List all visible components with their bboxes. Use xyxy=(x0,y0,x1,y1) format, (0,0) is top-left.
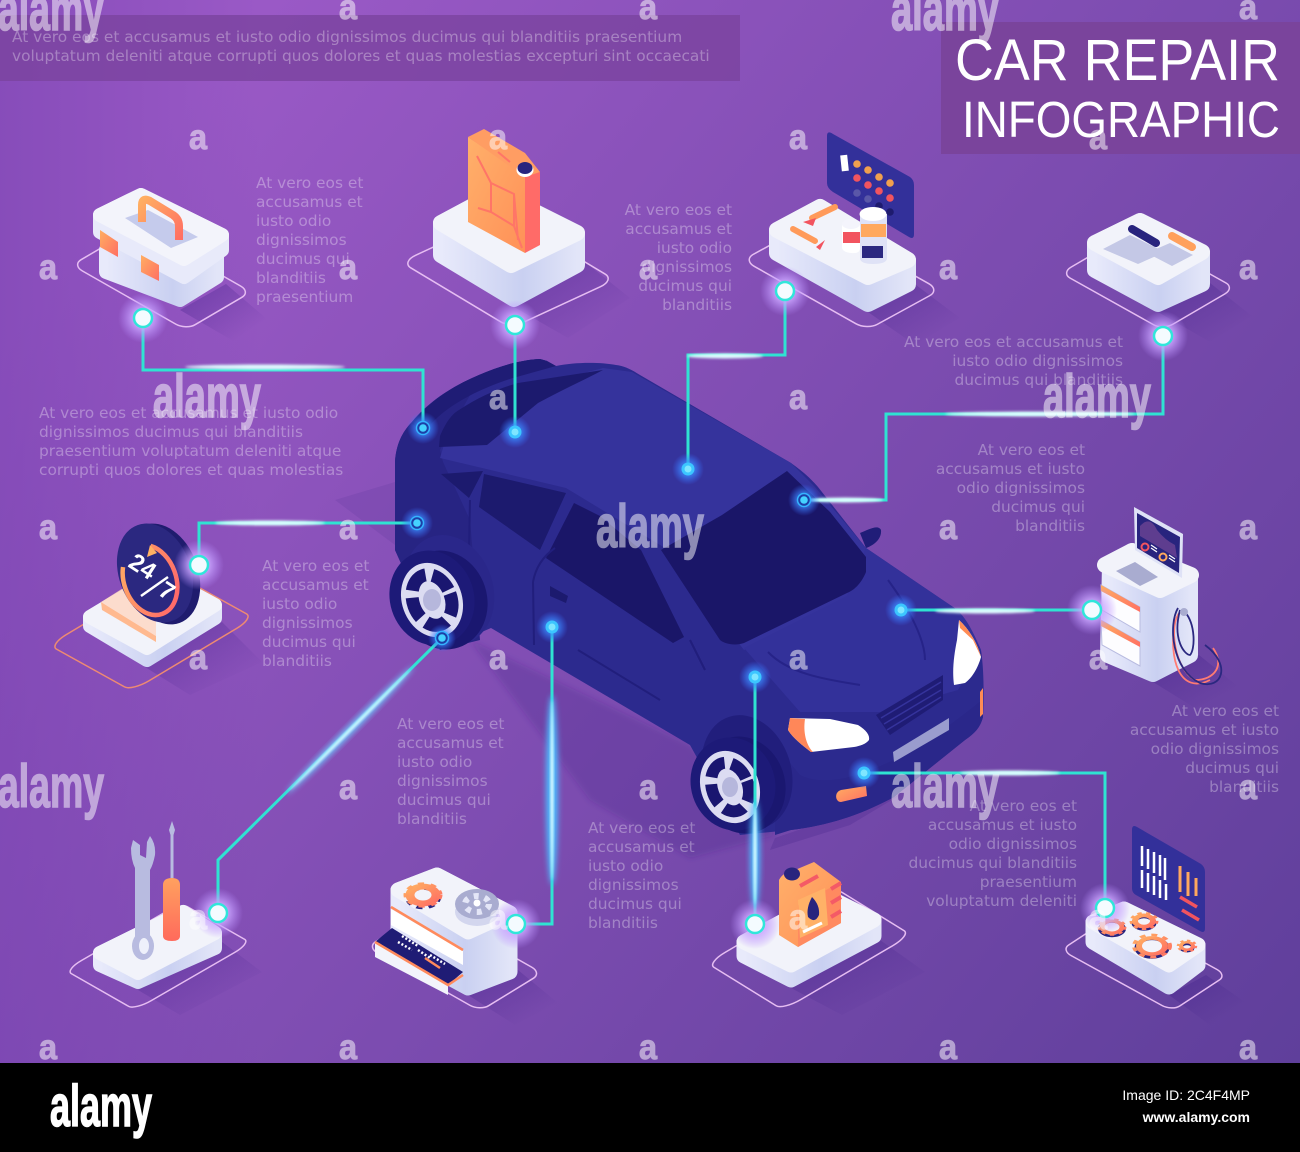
jerry can emboss xyxy=(477,152,522,248)
text block: panels: At vero eos et accusamus et xyxy=(904,333,1123,351)
rear window xyxy=(439,370,603,447)
text block: right upper: ducimus qui xyxy=(991,498,1085,516)
text block: wrench xyxy=(397,715,504,828)
gears xyxy=(1099,919,1125,936)
peach glow on slab xyxy=(101,602,156,642)
text block: toolbox: accusamus et xyxy=(256,193,363,211)
text block: drawer xyxy=(588,819,695,932)
car point: bumper xyxy=(848,757,880,789)
clock disc: 24 xyxy=(124,548,161,586)
text block: 24/7: dignissimos xyxy=(262,614,353,632)
node: wrench xyxy=(193,888,243,938)
text block: toolbox: dignissimos xyxy=(256,231,347,249)
text block: jerry can: iusto odio xyxy=(657,239,732,257)
oil cap xyxy=(784,868,800,880)
text block: diagnostic: accusamus et iusto xyxy=(1130,721,1279,739)
watermark tiles: a xyxy=(939,1028,957,1067)
node: paint xyxy=(760,266,810,316)
intro text panel: voluptatum deleniti atque corrupti quos dolores et quas molestias excepturi sint occaecati xyxy=(12,47,710,65)
paint panel xyxy=(827,132,914,238)
node: oil xyxy=(730,899,780,949)
watermark tiles: a xyxy=(789,118,807,157)
text block: panels: ducimus qui blanditiis xyxy=(954,371,1123,389)
licence plate xyxy=(893,718,949,762)
diagnostic screen xyxy=(1134,507,1183,578)
node: gears xyxy=(1080,883,1130,933)
gear xyxy=(406,884,440,907)
watermark tiles: a xyxy=(639,248,657,287)
watermark tiles: a xyxy=(39,1028,57,1067)
car body silhouette xyxy=(395,359,984,835)
text block: gears: praesentium xyxy=(980,873,1077,891)
footer bar: www.alamy.com xyxy=(1142,1109,1250,1125)
connector lines xyxy=(143,291,1163,924)
platform: toolbox xyxy=(72,195,268,342)
watermark logos: alamy xyxy=(1043,363,1151,430)
right lamp xyxy=(980,688,983,717)
platform: paint shop xyxy=(743,132,960,345)
text block: panels: iusto odio dignissimos xyxy=(952,352,1123,370)
watermark tiles: a xyxy=(489,638,507,677)
text block: wrench: accusamus et xyxy=(397,734,504,752)
watermark tiles: a xyxy=(39,508,57,547)
watermark tiles: a xyxy=(489,378,507,417)
clock disc xyxy=(104,513,214,635)
text block: left wide: corrupti quos dolores et quas molestias xyxy=(39,461,343,479)
text block: 24/7: blanditiis xyxy=(262,652,332,670)
watermark tiles: a xyxy=(789,378,807,417)
side windows xyxy=(441,471,483,498)
platform: bodywork panels xyxy=(1061,221,1252,342)
watermark tiles: a xyxy=(1239,768,1257,807)
hood xyxy=(744,548,981,712)
paint can tall xyxy=(860,207,887,264)
bumper area xyxy=(775,700,983,835)
node: 24/7 xyxy=(174,540,224,590)
watermark logos: alamy xyxy=(153,363,261,430)
text block: diagnostic: At vero eos et xyxy=(1172,702,1279,720)
front wheel xyxy=(679,725,798,845)
text block: gears: ducimus qui blanditiis xyxy=(908,854,1077,872)
connector nodes xyxy=(118,266,1188,949)
node: drawer xyxy=(491,899,541,949)
toolbox recess xyxy=(125,210,198,248)
line glow highlights xyxy=(185,354,1135,910)
title xyxy=(941,22,1300,154)
text block: wrench: At vero eos et xyxy=(397,715,504,733)
text block: right upper: blanditiis xyxy=(1015,517,1085,535)
screwdriver xyxy=(163,821,180,941)
watermark tiles: a xyxy=(1089,118,1107,157)
footer bar: alamy xyxy=(50,1074,152,1139)
car point: rear xyxy=(401,507,433,539)
open drawer xyxy=(375,928,463,995)
watermark tiles: a xyxy=(939,508,957,547)
car point: windshield xyxy=(788,484,820,516)
watermark tiles: a xyxy=(189,638,207,677)
jerry can cap xyxy=(516,163,534,177)
toolbox latches xyxy=(100,230,118,257)
car ground shadow xyxy=(335,482,900,858)
jerry can body xyxy=(525,172,540,253)
text block: diagnostic xyxy=(1130,702,1279,796)
spoiler xyxy=(412,359,556,432)
diagnostic drawers xyxy=(1101,585,1140,632)
rear wheel xyxy=(377,539,500,661)
wheel rim xyxy=(455,889,499,926)
text block: diagnostic: odio dignissimos xyxy=(1151,740,1279,758)
platform: gears and tool board xyxy=(1061,826,1245,1025)
metal plates xyxy=(1103,235,1193,266)
rear arch xyxy=(390,523,508,657)
tool board xyxy=(1132,826,1205,932)
oil canister body xyxy=(779,862,841,947)
text block: jerry can: accusamus et xyxy=(625,220,732,238)
door handle xyxy=(550,586,568,603)
front arch xyxy=(687,703,807,841)
text block: left wide xyxy=(39,404,343,479)
car point: spoiler xyxy=(499,416,531,448)
car point: rear top xyxy=(407,412,439,444)
text block: toolbox: praesentium xyxy=(256,288,353,306)
grille xyxy=(876,675,943,735)
text block: jerry can: dignissimos xyxy=(641,258,732,276)
text block: wrench: iusto odio xyxy=(397,753,472,771)
left headlight xyxy=(788,718,869,752)
text block: drawer: At vero eos et xyxy=(588,819,695,837)
watermark tiles: a xyxy=(489,118,507,157)
plate handles xyxy=(1132,229,1156,243)
node: toolbox xyxy=(118,293,168,343)
watermark logos xyxy=(0,0,1151,820)
watermark tiles: a xyxy=(189,898,207,937)
watermark tiles: a xyxy=(189,118,207,157)
watermark tiles: a xyxy=(339,248,357,287)
text block: jerry can: blanditiis xyxy=(662,296,732,314)
text block: gears xyxy=(908,797,1077,910)
text block: left wide: praesentium voluptatum deleniti atque xyxy=(39,442,341,460)
toolbox handle xyxy=(142,200,179,240)
text block: toolbox: ducimus qui xyxy=(256,250,350,268)
fog lamp xyxy=(836,786,867,802)
intro text panel: At vero eos et accusamus et iusto odio dignissimos ducimus qui blanditiis praesentium xyxy=(12,28,682,46)
watermark tiles: a xyxy=(1089,898,1107,937)
watermark tiles: a xyxy=(1239,508,1257,547)
footer bar: Image ID: 2C4F4MP xyxy=(1122,1087,1250,1103)
watermark tiles: a xyxy=(489,898,507,937)
text block: diagnostic: ducimus qui xyxy=(1185,759,1279,777)
car point: door xyxy=(536,611,568,643)
watermark tiles: a xyxy=(1089,638,1107,677)
text block: wrench: blanditiis xyxy=(397,810,467,828)
car xyxy=(377,359,984,845)
text block: 24/7: iusto odio xyxy=(262,595,337,613)
text block: wrench: ducimus qui xyxy=(397,791,491,809)
platform: jerry can xyxy=(401,129,630,338)
text block: wrench: dignissimos xyxy=(397,772,488,790)
car point: roof xyxy=(672,453,704,485)
right headlight xyxy=(953,620,981,685)
car point: rear wheel xyxy=(428,624,456,652)
text block: toolbox: At vero eos et xyxy=(256,174,363,192)
paint rollers xyxy=(793,207,835,241)
text block: 24/7: accusamus et xyxy=(262,576,369,594)
text block: left wide: dignissimos ducimus qui blanditiis xyxy=(39,423,303,441)
mirror xyxy=(860,527,881,548)
node: jerry can xyxy=(490,300,540,350)
footer bar xyxy=(0,1063,1300,1152)
cables xyxy=(1173,612,1218,684)
car point: hood xyxy=(885,594,917,626)
watermark tiles: a xyxy=(1239,248,1257,287)
platform: wrench and screwdriver xyxy=(65,821,262,1015)
text block: toolbox: blanditiis xyxy=(256,269,326,287)
text block: right upper xyxy=(936,441,1085,535)
watermark tiles: a xyxy=(339,768,357,807)
node: panels xyxy=(1138,311,1188,361)
text block: jerry can xyxy=(625,201,732,314)
platform: 24/7 service xyxy=(49,513,262,695)
text block: drawer: dignissimos xyxy=(588,876,679,894)
text block: gears: accusamus et iusto xyxy=(928,816,1077,834)
text block: toolbox: iusto odio xyxy=(256,212,331,230)
watermark tiles: a xyxy=(1239,1028,1257,1067)
watermark tiles: a xyxy=(639,1028,657,1067)
watermark logos: alamy xyxy=(596,493,704,560)
platform: drawer cabinet xyxy=(367,875,558,1025)
clock disc: 7 xyxy=(154,576,180,606)
text block: gears: odio dignissimos xyxy=(949,835,1077,853)
oil label xyxy=(798,888,828,938)
text block: right upper: accusamus et iusto xyxy=(936,460,1085,478)
text block: 24/7: ducimus qui xyxy=(262,633,356,651)
text block: jerry can: ducimus qui xyxy=(638,277,732,295)
text block: left wide: At vero eos et accusamus et iusto odio xyxy=(39,404,338,422)
top drawer front xyxy=(391,909,463,965)
title: CAR REPAIR xyxy=(955,28,1280,93)
hood creases xyxy=(768,580,925,685)
watermark logos: alamy xyxy=(0,753,104,820)
node: diagnostic xyxy=(1067,585,1117,635)
text block: right upper: At vero eos et xyxy=(978,441,1085,459)
rear hatch shading xyxy=(395,359,547,650)
text block: drawer: iusto odio xyxy=(588,857,663,875)
text block: jerry can: At vero eos et xyxy=(625,201,732,219)
text block: 24/7: At vero eos et xyxy=(262,557,369,575)
platform: diagnostic machine xyxy=(1101,507,1240,708)
watermark tiles: a xyxy=(39,248,57,287)
text block: panels xyxy=(904,333,1123,389)
text block: drawer: blanditiis xyxy=(588,914,658,932)
text block: gears: At vero eos et xyxy=(970,797,1077,815)
watermark tiles: a xyxy=(639,768,657,807)
text block: drawer: ducimus qui xyxy=(588,895,682,913)
windshield xyxy=(661,471,866,644)
watermark tiles: a xyxy=(339,508,357,547)
text block: 24/7 xyxy=(262,557,369,670)
text block: right upper: odio dignissimos xyxy=(957,479,1085,497)
platform: oil canister xyxy=(707,862,925,1015)
wrench xyxy=(131,836,155,960)
paint can small xyxy=(842,219,860,253)
keyboard xyxy=(1116,562,1158,586)
watermark tiles: a xyxy=(789,638,807,677)
text block: gears: voluptatum deleniti xyxy=(926,892,1077,910)
text block: diagnostic: blanditiis xyxy=(1209,778,1279,796)
car point: bonnet xyxy=(739,661,771,693)
watermark tiles: a xyxy=(339,1028,357,1067)
roof xyxy=(440,368,866,650)
intro text panel xyxy=(0,15,740,81)
watermark logos: alamy xyxy=(891,753,999,820)
text block: toolbox xyxy=(256,174,363,306)
text block: drawer: accusamus et xyxy=(588,838,695,856)
watermark tiles: a xyxy=(789,898,807,937)
watermark tiles: a xyxy=(939,248,957,287)
door lines xyxy=(468,500,705,700)
